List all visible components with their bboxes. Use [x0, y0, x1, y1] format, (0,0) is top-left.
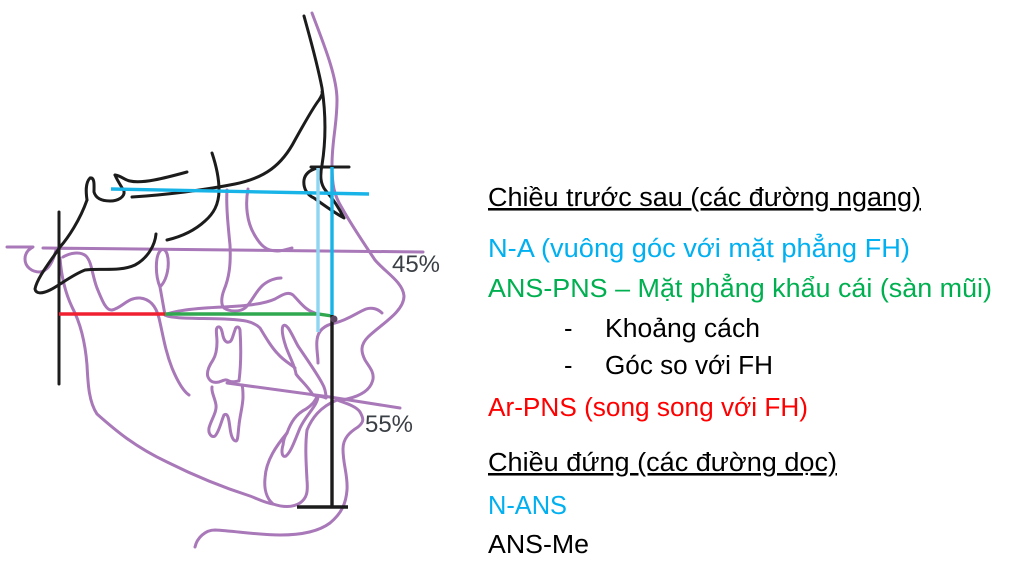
purple palate: [165, 293, 315, 315]
purple upper lip: [317, 308, 382, 363]
lower molar: [209, 385, 243, 441]
label 45 percent: 45%: [392, 251, 440, 278]
occlusal plane: [227, 383, 400, 408]
black anterior cranial floor: [132, 92, 322, 197]
black cranial base outline: [115, 172, 187, 182]
purple upper incisor: [282, 325, 326, 398]
purple orbit and sinus lines: [222, 190, 281, 311]
ANS point blob: [330, 316, 338, 322]
black sella curve: [167, 153, 219, 240]
green ANS-PNS line: [165, 314, 332, 316]
red Ar-PNS line: [59, 312, 165, 316]
text block: measurements: [488, 184, 992, 559]
bullet: distance: Khoảng cách: [605, 315, 760, 343]
bullet: distance: -: [564, 315, 572, 343]
upper molar: [207, 327, 241, 382]
heading: anteroposterior: Chiều trước sau (các đường ngang): [488, 184, 921, 212]
purple lower incisor: [282, 397, 318, 456]
ANS-Me label: ANS-Me: [488, 531, 589, 559]
cephalometric tracing diagram: [7, 13, 440, 547]
purple soft tissue profile: [195, 13, 404, 547]
Frankfort horizontal plane and ear: [7, 247, 423, 272]
purple mandible: [63, 253, 189, 395]
heading: vertical: Chiều đứng (các đường dọc): [488, 449, 837, 477]
black menton tick: [297, 505, 348, 509]
black frontal bone and nasal bone: [304, 16, 344, 218]
label 55 percent: 55%: [365, 411, 413, 438]
blue vertical N-ANS line: [330, 167, 334, 315]
bullet: angle: -: [564, 352, 572, 380]
black nasion tick: [311, 166, 349, 168]
N-ANS label: N-ANS: [488, 492, 567, 520]
N-A line label: N-A (vuông góc với mặt phẳng FH): [488, 233, 910, 263]
blue horizontal N-A line: [111, 189, 369, 194]
bullet: angle: Góc so với FH: [605, 352, 773, 380]
black vertical reference line: [58, 212, 60, 384]
black vertical ANS-Me line: [330, 315, 334, 507]
purple pterygoid fissure: [156, 249, 168, 315]
Ar-PNS line label: Ar-PNS (song song với FH): [488, 394, 808, 422]
light blue vertical line: [316, 168, 320, 332]
ANS-PNS line label: ANS-PNS – Mặt phẳng khẩu cái (sàn mũi): [488, 273, 992, 303]
